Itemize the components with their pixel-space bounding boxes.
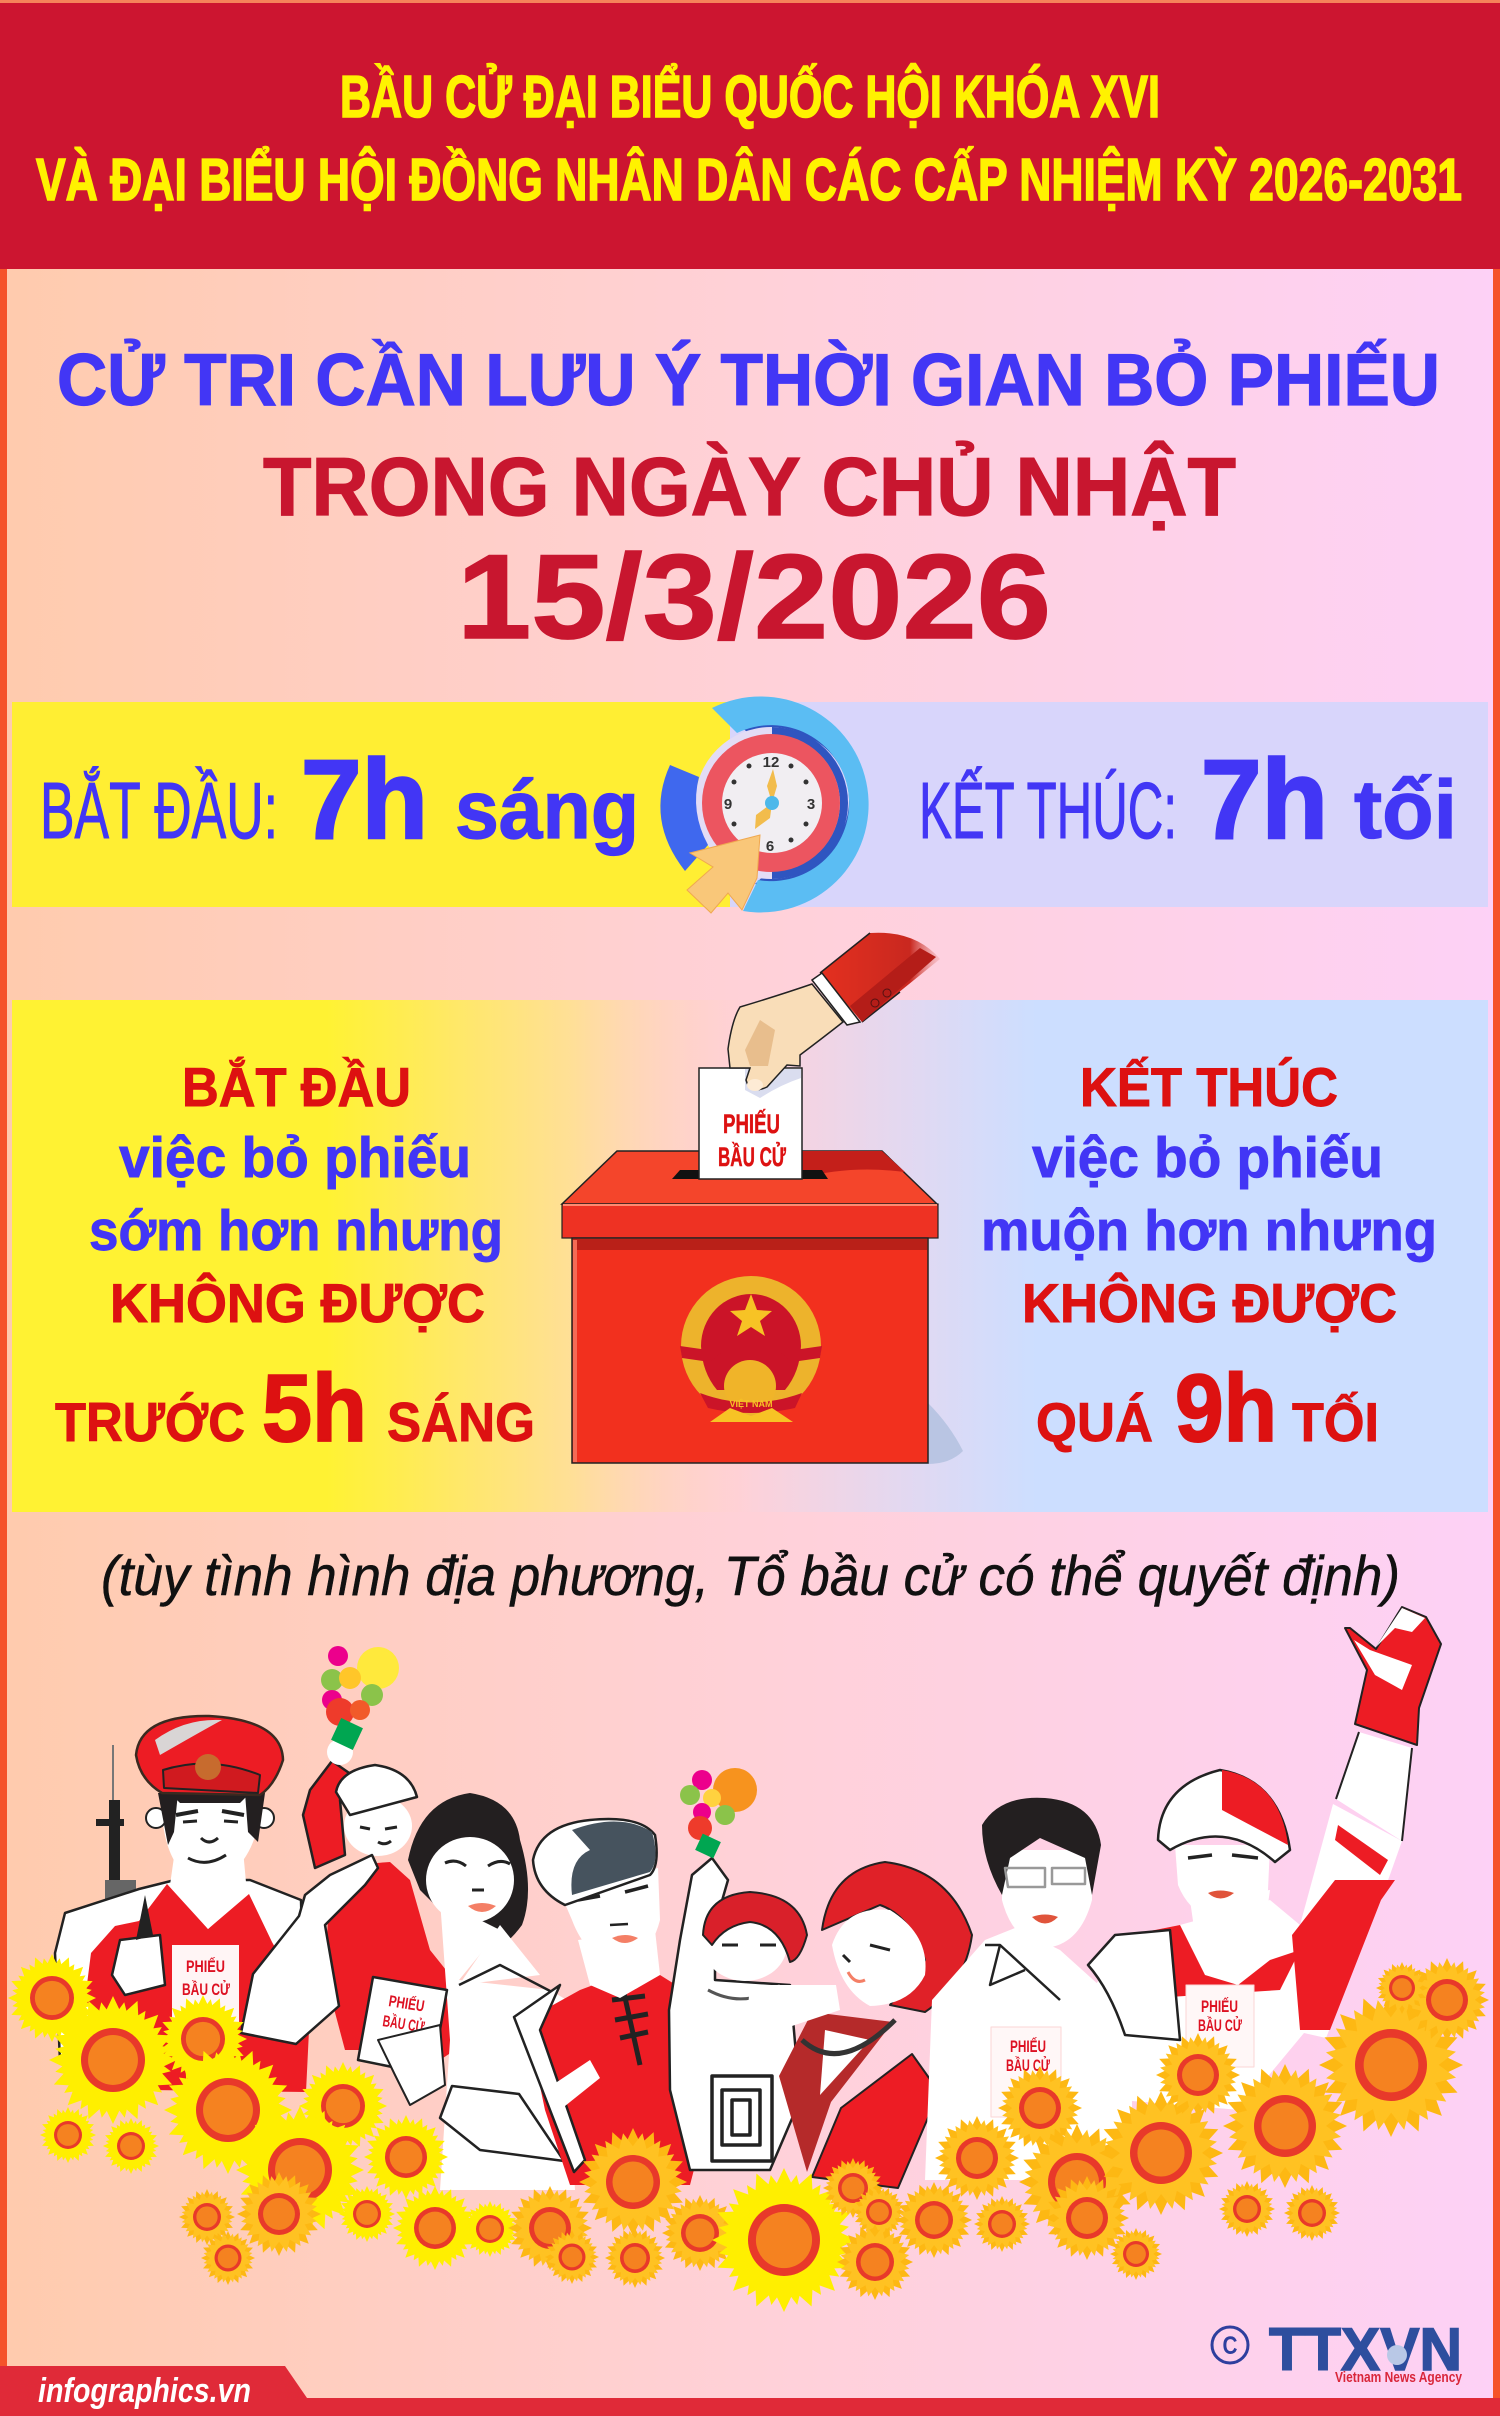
emblem gear [724, 1360, 776, 1412]
clock numerals [724, 754, 815, 855]
lower arm [440, 2086, 564, 2161]
helmet [1158, 1770, 1290, 1862]
panel: late end [738, 1000, 1488, 1512]
box lid top [562, 1151, 937, 1204]
soldier ballot [172, 1945, 239, 2022]
box lid front [562, 1204, 938, 1238]
footer site name: infographics.vn [38, 2372, 251, 2410]
mother ballot: BẦU CỬ [381, 2011, 426, 2037]
soldier ballot: BẦU CỬ [182, 1980, 231, 1999]
ballot slot [672, 1170, 828, 1179]
emblem wheat base [710, 1408, 793, 1422]
sunflowers [5, 1951, 1492, 2318]
ballot box illustration [562, 933, 963, 1464]
end hour: 7h [1201, 737, 1328, 862]
text: early start rule: KHÔNG ĐƯỢC [110, 1272, 485, 1334]
ballot: BẦU CỬ [1006, 2056, 1051, 2075]
second bouquet [680, 1768, 757, 1858]
title line 2: TRONG NGÀY CHỦ NHẬT [263, 440, 1236, 533]
figure: man with glasses [925, 1798, 1132, 2180]
light blue arc [712, 696, 869, 912]
end period: tối [1354, 763, 1457, 856]
panel: early start [12, 1000, 762, 1512]
left orange border [0, 269, 7, 2416]
text: late end rule: TỐI [1292, 1391, 1379, 1453]
copyright mark [1212, 2327, 1248, 2363]
text: early start rule: SÁNG [387, 1391, 535, 1453]
figure: child in red hat [669, 1768, 807, 2170]
worker ballot: PHIẾU [1201, 1997, 1238, 2016]
bouquet [321, 1646, 399, 1750]
soldier cap [136, 1716, 283, 1795]
panel: start and end time [12, 702, 1488, 907]
header line 1: BẦU CỬ ĐẠI BIỂU QUỐC HỘI KHÓA XVI [340, 63, 1160, 130]
main title [57, 340, 1440, 664]
footer bar [0, 2366, 1500, 2416]
worker ballot: BẦU CỬ [1198, 2016, 1243, 2035]
cursor arrow [687, 835, 760, 913]
text: late end rule: QUÁ [1036, 1391, 1153, 1453]
ballot: PHIẾU [1010, 2037, 1046, 2056]
figure: worker with helmet [1085, 1607, 1441, 2110]
text: early start rule: việc bỏ phiếu [119, 1126, 471, 1190]
figure: soldier [55, 1716, 310, 2092]
title line 1: CỬ TRI CẦN LƯU Ý THỜI GIAN BỎ PHIẾU [57, 340, 1440, 421]
text: early start rule: TRƯỚC [55, 1391, 245, 1453]
clock hands [755, 769, 777, 829]
clock numerals: 12 [763, 754, 779, 771]
start label: BẮT ĐẦU: [40, 766, 278, 855]
apron [712, 2076, 772, 2161]
end label: KẾT THÚC: [919, 766, 1177, 855]
date: 15/3/2026 [457, 530, 1051, 664]
box shadow [928, 1403, 963, 1464]
clock rim [702, 734, 840, 872]
text: late end rule: muộn hơn nhưng [981, 1199, 1437, 1263]
soldier hand [112, 1935, 165, 1995]
emblem star [730, 1294, 772, 1336]
worker ballot [1186, 1985, 1254, 2067]
text: early start rule: sớm hơn nhưng [89, 1199, 503, 1263]
box body [572, 1238, 928, 1463]
logo: TTXVN [1212, 2316, 1463, 2386]
clock numerals: 6 [766, 838, 774, 855]
raised glove [1345, 1607, 1441, 1745]
clock numerals: 3 [807, 796, 815, 813]
text: late end rule [981, 1056, 1437, 1462]
mother ballot: PHIẾU [387, 1991, 426, 2016]
ballot paper: PHIẾU [723, 1108, 780, 1139]
soldier ballot: PHIẾU [186, 1957, 225, 1976]
raised arm [241, 1855, 378, 2044]
copyright mark: C [1222, 2332, 1238, 2360]
emblem: VIỆT NAM [729, 1398, 773, 1409]
agency wordmark: TTXVN [1269, 2316, 1462, 2383]
ballot paper [699, 1068, 802, 1179]
start hour: 7h [301, 737, 428, 862]
text: late end rule: KẾT THÚC [1080, 1056, 1338, 1118]
voter hand with sleeve [728, 933, 940, 1091]
worker glove hand [1088, 1930, 1180, 2040]
ballot paper: BẦU CỬ [718, 1140, 786, 1172]
text: early start rule [55, 1056, 535, 1462]
emblem [680, 1276, 822, 1422]
start period: sáng [455, 763, 639, 856]
header banner [0, 0, 1500, 269]
rifle [96, 1745, 136, 1902]
text: late end rule: việc bỏ phiếu [1032, 1126, 1383, 1190]
figure: child with bouquet [303, 1646, 470, 2060]
clock numerals: 9 [724, 796, 732, 813]
figure: man in hat [514, 1819, 712, 2185]
note: (tùy tình hình địa phương, Tổ bầu cử có thể quyết định) [101, 1544, 1400, 1607]
text: early start rule: 5h [262, 1355, 367, 1462]
text: early start rule: BẮT ĐẦU [182, 1056, 411, 1118]
figure: mother [241, 1793, 575, 2190]
ballot [991, 2027, 1061, 2117]
globe [1387, 2345, 1407, 2365]
lavender end bar [730, 702, 1488, 907]
emblem ribbon [700, 1393, 802, 1413]
blue arc chunk [660, 765, 708, 871]
yellow start bar [12, 702, 730, 907]
clock face [722, 753, 822, 853]
figure: woman in red headdress [745, 1862, 972, 2188]
text: late end rule: KHÔNG ĐƯỢC [1022, 1272, 1397, 1334]
man hat [533, 1819, 657, 1905]
raised arm [1336, 1732, 1412, 1841]
agency tagline: Vietnam News Agency [1335, 2369, 1463, 2386]
right orange border [1493, 269, 1500, 2416]
icon: clock with arrow [660, 696, 869, 913]
people illustration [5, 1607, 1492, 2318]
mother ballot [358, 1977, 447, 2075]
text: late end rule: 9h [1175, 1355, 1277, 1462]
